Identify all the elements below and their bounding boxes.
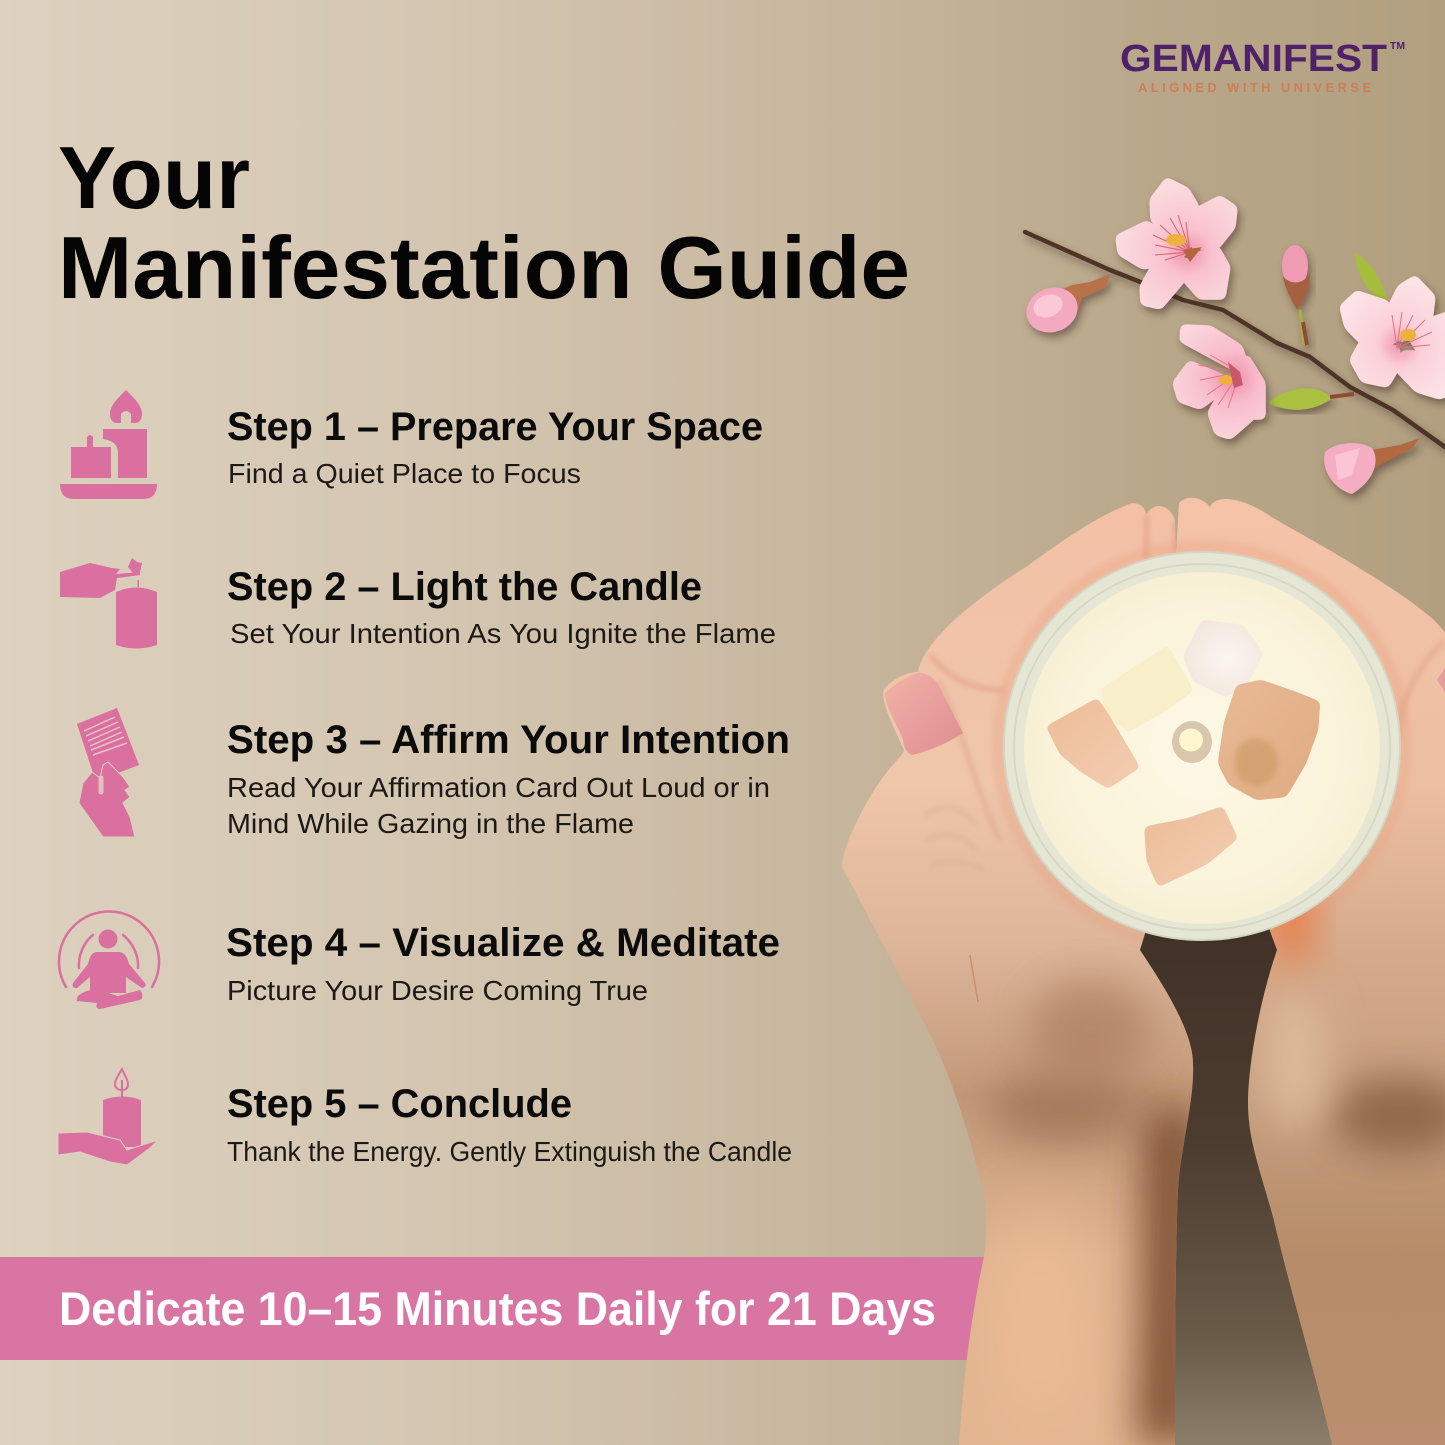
step 3 text: Read Your Affirmation Card Out Loud or in: [227, 772, 770, 803]
title: Manifestation Guide: [58, 218, 910, 317]
flower 2: [1175, 327, 1263, 437]
flame glow: [1172, 721, 1212, 763]
flower 3 stamens: [1392, 312, 1432, 348]
step 3 text: Mind While Gazing in the Flame: [227, 808, 634, 839]
orange glow: [1272, 885, 1312, 965]
branch: [1025, 232, 1445, 447]
step 3 icon: hand holding card: [77, 708, 139, 837]
logo: ALIGNED WITH UNIVERSE: [1138, 80, 1371, 95]
step 2 text: Set Your Intention As You Ignite the Flame: [230, 618, 776, 649]
step 3 text: [227, 718, 790, 839]
logo: TM: [1390, 41, 1405, 52]
finger crease lines: [930, 515, 1176, 690]
step 5 text: Thank the Energy. Gently Extinguish the Candle: [227, 1136, 792, 1167]
right thumb crease: [1398, 640, 1445, 740]
right nail: [1437, 668, 1445, 692]
stone: left peach: [1048, 700, 1138, 787]
step 5 text: [227, 1082, 792, 1167]
step 3 text: Step 3 – Affirm Your Intention: [227, 718, 790, 762]
step 2 text: [227, 565, 776, 649]
stone: white: [1185, 622, 1261, 695]
stone: lower peach: [1146, 808, 1236, 885]
flower 2 stamens: [1198, 355, 1243, 408]
step 1 text: [227, 405, 763, 489]
title: Your: [58, 128, 250, 227]
step 4 icon: meditating figure: [59, 911, 159, 1009]
title: [58, 128, 910, 317]
candle jar rim: [1004, 552, 1400, 940]
logo: [1120, 38, 1405, 95]
step 5 icon: hand holding candle: [58, 1069, 158, 1165]
left wrist dark side: [1135, 1110, 1200, 1445]
stone: large peach: [1220, 682, 1318, 798]
step 4 text: [226, 921, 780, 1006]
logo: GEMANIFEST: [1120, 38, 1387, 80]
step 1 text: Step 1 – Prepare Your Space: [227, 405, 763, 449]
left bud: [1020, 274, 1110, 340]
step 2 icon: hand lighting candle: [60, 558, 157, 648]
top bud: [1282, 245, 1310, 345]
rim groove: [1014, 564, 1390, 930]
left hand mid shade: [1030, 980, 1150, 1080]
leaf upper: [1355, 253, 1388, 304]
stone: translucent: [1103, 648, 1191, 730]
leaf lower: [1268, 388, 1332, 410]
banner: [0, 1257, 995, 1360]
salmon shade around jar: [1176, 541, 1410, 938]
step 5 text: Step 5 – Conclude: [227, 1082, 572, 1126]
step 1 icon: candles on tray: [60, 390, 157, 499]
candle: [1004, 552, 1400, 940]
flower 3: [1342, 278, 1445, 397]
left hand: [842, 503, 1194, 1445]
cherry blossom branch: [1020, 180, 1445, 494]
salmon shade around jar: [992, 544, 1174, 943]
flame: [1179, 728, 1203, 752]
flower 1 stamens: [1153, 215, 1202, 262]
stone speckle: [1234, 738, 1278, 786]
right hand: [1176, 498, 1445, 1445]
flower 1: [1118, 180, 1235, 307]
leaf stem: [1330, 394, 1354, 397]
step 4 text: Step 4 – Visualize & Meditate: [226, 921, 780, 965]
thumb creases: [925, 808, 985, 870]
step 1 text: Find a Quiet Place to Focus: [228, 458, 581, 489]
bottom bud: [1324, 438, 1420, 494]
right hand wrist highlight: [1263, 990, 1327, 1130]
gap between the hands: [1100, 900, 1340, 1445]
candle wax: [1024, 572, 1380, 924]
right hand knuckle shadow: [1330, 1077, 1445, 1153]
banner: Dedicate 10–15 Minutes Daily for 21 Days: [59, 1282, 936, 1335]
left hand brown shade: [990, 1074, 1140, 1146]
wrist light: [1004, 1224, 1078, 1372]
step 4 text: Picture Your Desire Coming True: [227, 975, 648, 1006]
step 2 text: Step 2 – Light the Candle: [227, 565, 702, 609]
thumb nail: [885, 673, 963, 755]
